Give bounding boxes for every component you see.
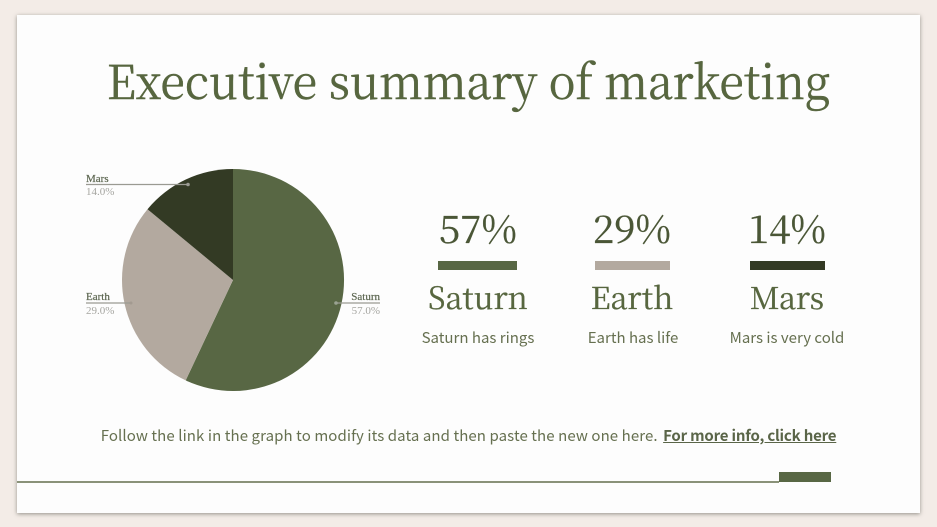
slice: Mars 14% — [148, 169, 233, 280]
accent block — [779, 472, 831, 482]
stat: Saturn — [422, 200, 534, 348]
name: Earth — [591, 274, 673, 318]
label: Earth: 29.0% — [86, 305, 114, 317]
description: Mars is very cold — [730, 327, 844, 348]
slice: Earth 29% — [122, 209, 233, 380]
description: Earth has life — [588, 327, 678, 348]
name: Saturn — [428, 274, 528, 318]
label: Saturn: 57.0% — [352, 305, 380, 317]
label: Mars: Mars — [86, 173, 109, 185]
color bar — [750, 261, 825, 270]
title: Executive summary of marketing — [107, 46, 830, 113]
description: Saturn has rings — [422, 327, 534, 348]
color bar — [595, 261, 670, 270]
color bar — [438, 261, 517, 270]
footer note: Follow the link in the graph to modify its data and then paste the new one here. For more info, click here — [101, 425, 836, 446]
stat: Mars — [730, 200, 844, 348]
label: Earth — [86, 291, 132, 317]
label: Earth: Earth — [86, 291, 110, 303]
slice: Saturn 57% — [186, 169, 344, 391]
bottom rule — [17, 481, 779, 482]
stat: Earth — [588, 200, 678, 348]
label: Saturn: Saturn — [351, 291, 380, 303]
percentage: 57% — [439, 200, 517, 255]
label: Mars: 14.0% — [86, 186, 114, 198]
percentage: 29% — [593, 200, 671, 255]
percentage: 14% — [748, 200, 826, 255]
label: Saturn — [334, 291, 380, 317]
label: Mars — [86, 173, 190, 198]
name: Mars — [750, 274, 824, 318]
